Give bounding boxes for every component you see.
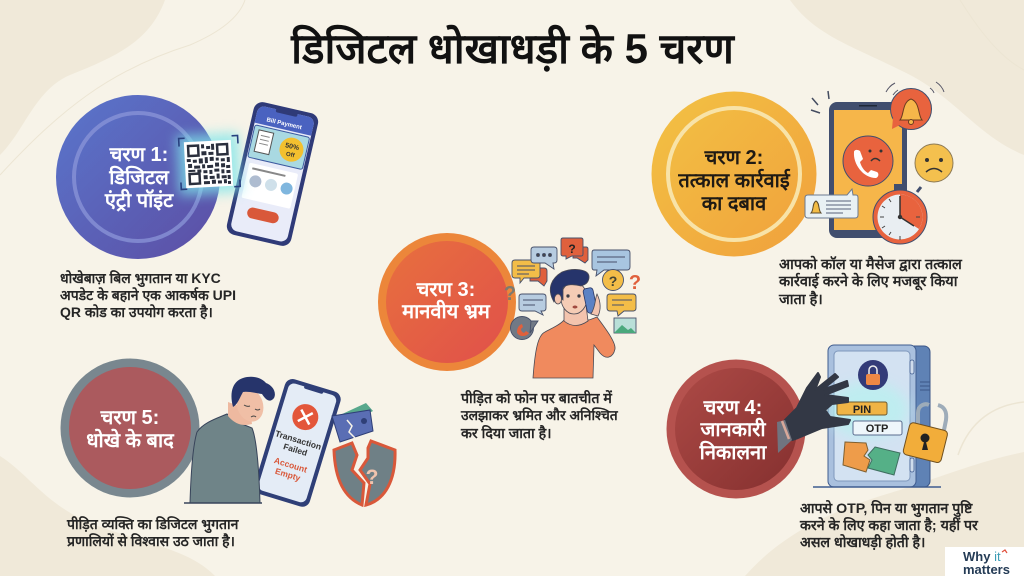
- icon: message bubble: [805, 189, 858, 218]
- icon: QR code: [176, 132, 242, 196]
- step 5 circle: [60, 358, 200, 498]
- logo: Why it matters: [945, 547, 1024, 576]
- step 5 description line 2: प्रणालियों से विश्वास उठ जाता है।: [66, 533, 235, 549]
- step 4 circle: निकालना: [699, 440, 767, 464]
- step 2 circle: तत्काल कार्रवाई: [677, 168, 791, 192]
- icon: question marks: ?: [609, 273, 617, 289]
- icon: PIN and OTP labels: [837, 402, 902, 435]
- icon: urgent phone: [811, 91, 907, 238]
- icon: sad face: [915, 144, 953, 182]
- step 4 circle: [666, 360, 806, 498]
- icon: bell alert: [886, 82, 944, 130]
- step 1 description line 3: QR कोड का उपयोग करता है।: [60, 304, 213, 320]
- step 1 description line 2: अपडेट के बहाने एक आकर्षक UPI: [60, 287, 236, 303]
- icon: question marks: ?: [568, 242, 576, 256]
- panel: step 1: [56, 95, 320, 288]
- step 4 description line 3: असल धोखाधड़ी होती है।: [800, 533, 925, 551]
- step 1 circle: एंट्री पॉइंट: [104, 188, 174, 212]
- panel: step 5: [60, 358, 395, 534]
- icon: broken wallet: [332, 403, 373, 442]
- step 2 circle: का दबाव: [701, 193, 767, 215]
- icon: gloved hand: [777, 373, 850, 453]
- step 5 circle: चरण 5:: [100, 407, 159, 429]
- icon: PIN and OTP labels: OTP: [866, 423, 888, 435]
- icon: open padlock: [902, 404, 948, 463]
- step 2 circle: चरण 2:: [704, 147, 763, 169]
- step 2 description line 3: जाता है।: [778, 290, 823, 308]
- panel: step 2: [652, 82, 963, 273]
- step 3 circle: चरण 3:: [416, 279, 475, 301]
- icon: broken shield: [334, 441, 395, 505]
- step 1 circle: चरण 1:: [109, 144, 168, 166]
- icon: broken shield: ?: [366, 466, 378, 489]
- icon: broken card: [843, 442, 900, 475]
- step 4 description line 2: करने के लिए कहा जाता है; यहीं पर: [799, 516, 979, 534]
- step 3 circle: [378, 233, 516, 371]
- icon: stopwatch: [873, 184, 927, 244]
- icon: phone with bill payment: 50%: [284, 142, 300, 152]
- icon: sad man: [184, 377, 275, 503]
- step 1 circle: डिजिटल: [108, 165, 170, 189]
- title: डिजिटल धोखाधड़ी के 5 चरण: [290, 24, 735, 72]
- icon: chat bubbles: [510, 238, 636, 340]
- icon: question marks: ?: [629, 272, 641, 294]
- step 5 description: पीड़ित व्यक्ति का डिजिटल भुगतान: [66, 516, 240, 534]
- panel: step 3: [378, 233, 641, 407]
- step 3 description line 3: कर दिया जाता है।: [460, 424, 552, 442]
- icon: confused man on phone: [533, 270, 615, 378]
- step 2 description line 2: कार्रवाई करने के लिए मजबूर किया: [778, 272, 959, 291]
- logo: Why it matters: Why it: [963, 549, 1001, 564]
- icon: failed transaction phone: Transaction: [274, 428, 323, 452]
- icon: safe: [813, 345, 941, 487]
- icon: failed transaction phone: Account: [273, 455, 309, 475]
- icon: failed transaction phone: Empty: [274, 466, 302, 483]
- step 1 circle: [56, 95, 220, 259]
- icon: phone with bill payment: Bill Payment: [266, 117, 302, 131]
- step 1 description: धोखेबाज़ बिल भुगतान या KYC: [60, 270, 221, 288]
- step 3 description line 2: उलझाकर भ्रमित और अनिश्चित: [460, 407, 619, 423]
- icon: failed transaction phone: Failed: [282, 441, 309, 458]
- step 4 circle: चरण 4:: [703, 397, 762, 419]
- step 4 circle: जानकारी: [699, 417, 766, 441]
- icon: question marks: [504, 242, 641, 305]
- step 3 circle: मानवीय भ्रम: [401, 299, 491, 323]
- step 5 circle: धोखे के बाद: [86, 428, 175, 452]
- panel: step 4: [666, 345, 973, 518]
- step 2 circle: [652, 92, 816, 256]
- step 3 description: पीड़ित को फोन पर बातचीत में: [460, 389, 613, 407]
- icon: phone with bill payment: Off: [285, 152, 296, 160]
- step 4 description: आपसे OTP, पिन या भुगतान पुष्टि: [800, 499, 973, 518]
- icon: question marks: ?: [504, 283, 516, 305]
- icon: PIN and OTP labels: PIN: [853, 404, 871, 416]
- step 2 description: आपको कॉल या मैसेज द्वारा तत्काल: [779, 255, 963, 273]
- icon: phone with bill payment: [225, 100, 320, 248]
- icon: failed transaction phone: [252, 377, 343, 509]
